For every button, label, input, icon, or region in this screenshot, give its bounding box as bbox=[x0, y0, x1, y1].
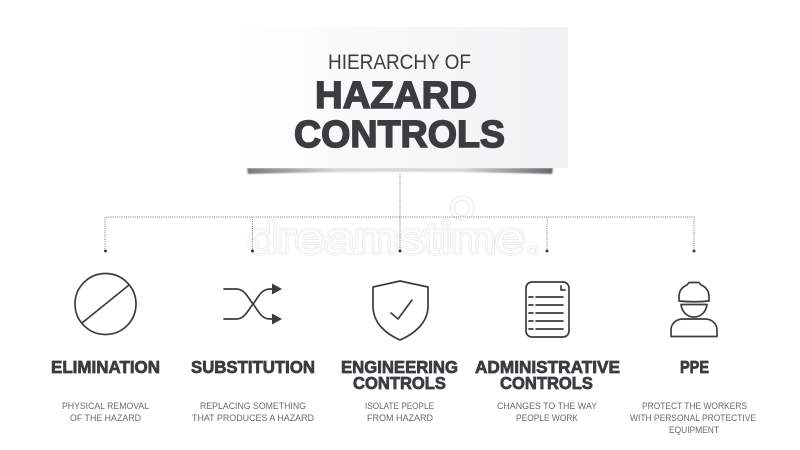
description: engineering controls bbox=[365, 401, 434, 424]
column: substitution bbox=[191, 284, 315, 424]
title: controls: CONTROLS bbox=[294, 114, 505, 156]
description: administrative controls bbox=[497, 401, 598, 424]
heading: engineering controls: ENGINEERING bbox=[341, 357, 458, 377]
heading: administrative controls bbox=[475, 357, 620, 393]
description: elimination: OF THE HAZARD bbox=[70, 413, 141, 424]
icon: document bbox=[526, 282, 569, 337]
description: ppe: EQUIPMENT bbox=[669, 425, 719, 436]
title: hazard: HAZARD bbox=[315, 75, 477, 117]
heading: engineering controls bbox=[341, 357, 458, 393]
heading: engineering controls: CONTROLS bbox=[353, 373, 446, 393]
heading: substitution: SUBSTITUTION bbox=[191, 357, 315, 377]
heading: administrative controls: ADMINISTRATIVE bbox=[475, 357, 620, 377]
icon: worker with hard hat bbox=[671, 282, 717, 336]
description: elimination: PHYSICAL REMOVAL bbox=[62, 401, 150, 412]
connector tree bbox=[104, 174, 696, 252]
icon: prohibited circle bbox=[75, 274, 136, 334]
description: ppe: PROTECT THE WORKERS bbox=[642, 401, 747, 412]
icon: shield with check bbox=[373, 281, 428, 340]
description: substitution: THAT PRODUCES A HAZARD bbox=[192, 413, 314, 424]
description: administrative controls: PEOPLE WORK bbox=[516, 413, 579, 424]
panel shadow bbox=[247, 168, 553, 174]
heading: elimination: ELIMINATION bbox=[51, 357, 160, 377]
watermark: dreamstime. bbox=[248, 214, 540, 263]
watermark bbox=[248, 196, 540, 263]
heading: ppe: PPE bbox=[680, 357, 709, 377]
column: elimination bbox=[51, 274, 160, 424]
description: ppe: WITH PERSONAL PROTECTIVE bbox=[630, 413, 756, 424]
icon: shuffle arrows bbox=[224, 284, 282, 324]
heading: administrative controls: CONTROLS bbox=[500, 373, 593, 393]
description: substitution: REPLACING SOMETHING bbox=[200, 401, 306, 412]
title: hierarchy of: HIERARCHY OF bbox=[328, 50, 471, 74]
column: administrative controls bbox=[475, 282, 620, 424]
column: ppe bbox=[630, 282, 756, 436]
panel card bbox=[232, 27, 568, 168]
description: engineering controls: ISOLATE PEOPLE bbox=[365, 401, 434, 412]
description: ppe bbox=[630, 401, 756, 436]
description: engineering controls: FROM HAZARD bbox=[367, 413, 433, 424]
column: engineering controls bbox=[341, 281, 458, 424]
watermark: dreamstime. bbox=[248, 214, 540, 263]
title panel bbox=[232, 27, 568, 174]
description: administrative controls: CHANGES TO THE WAY bbox=[497, 401, 598, 412]
watermark: dreamstime. bbox=[248, 214, 540, 263]
description: substitution bbox=[192, 401, 314, 424]
description: elimination bbox=[62, 401, 150, 424]
